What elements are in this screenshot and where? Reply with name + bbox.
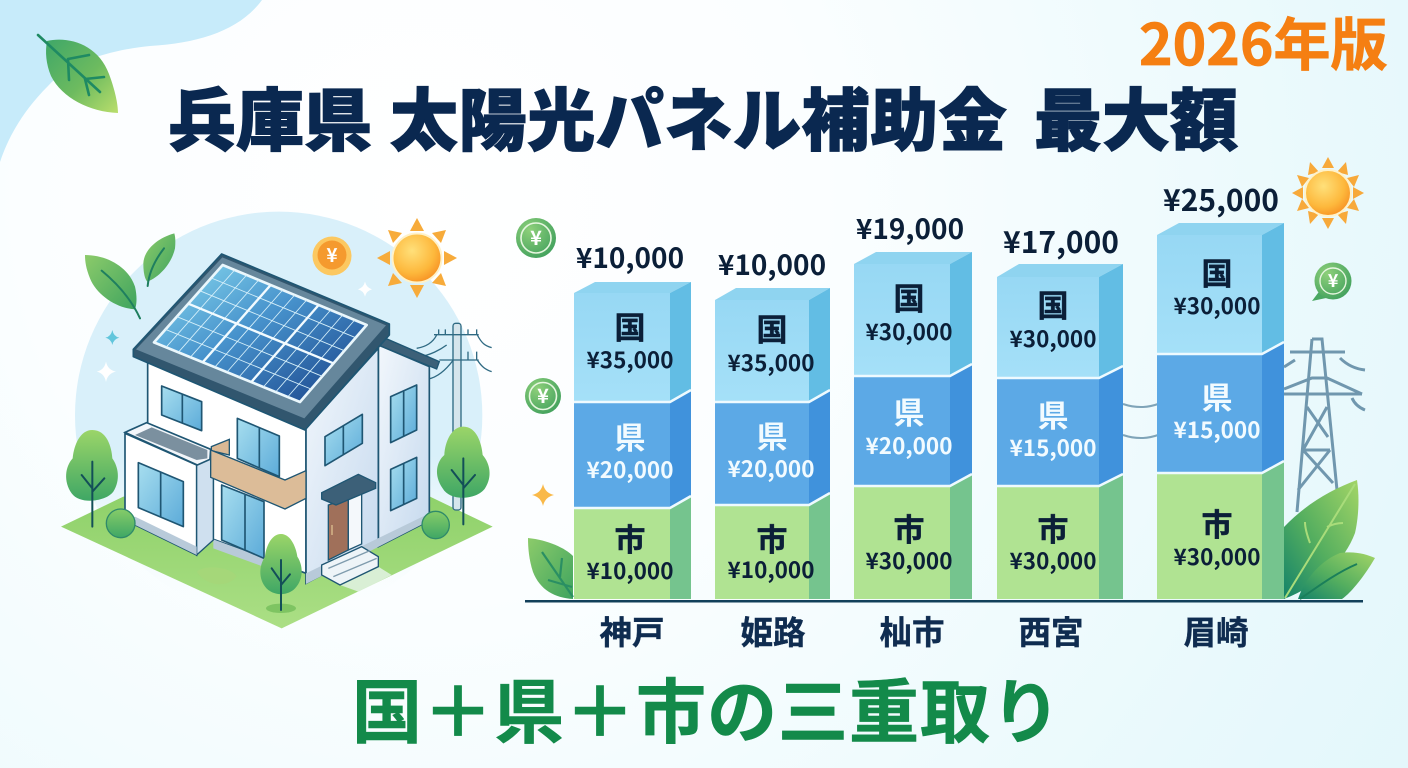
entrance — [322, 474, 378, 585]
bar: 西宮: 県 — [1038, 391, 1068, 436]
bar: 神戸: 国 — [614, 303, 646, 348]
title: 兵庫県 — [168, 66, 372, 165]
side wing — [378, 337, 439, 547]
title: 最大額 — [1034, 66, 1238, 165]
bar: 眉崎: 県 — [1202, 373, 1232, 418]
icon: wires between bars — [1123, 404, 1158, 438]
title: 太陽光パネル補助金 — [390, 66, 1007, 165]
icon: green yen coin top: ¥ — [530, 222, 542, 251]
annex — [125, 423, 213, 555]
bottom slogan: 国＋県＋市の三重取り — [352, 657, 1062, 758]
icon: orange yen coin: ¥ — [326, 241, 338, 268]
windows — [138, 385, 417, 558]
solar panel — [154, 265, 367, 402]
icon: green yen coin middle — [525, 378, 561, 414]
bar: 神戸: ¥10,000 — [576, 237, 684, 277]
city labels: 杣市 — [879, 607, 945, 654]
icon: sun near house — [377, 218, 457, 298]
bar: 杣市: 市 — [894, 505, 924, 550]
bar: 西宮: ¥17,000 — [1003, 218, 1119, 262]
icon: sun near tower — [1292, 157, 1364, 229]
icon: top-left leaf — [38, 35, 118, 113]
illustration: house — [61, 212, 493, 628]
bar: 西宮: 国 — [1038, 281, 1068, 326]
house backdrop circle — [75, 212, 482, 619]
corner wave — [0, 0, 262, 162]
city labels: 神戸 — [599, 607, 665, 654]
front-right wall — [306, 348, 378, 583]
icon: transmission tower — [1284, 339, 1365, 512]
bar: 杣市: 県 — [894, 388, 924, 433]
bar: 姫路: 市 — [756, 515, 788, 560]
bar: 神戸 — [574, 237, 691, 599]
bar: 神戸: ¥20,000 — [587, 453, 673, 485]
roof — [133, 254, 389, 430]
bar: 杣市: ¥19,000 — [856, 208, 964, 248]
year badge: 2026年版 — [1139, 0, 1388, 82]
bar: 西宮: ¥15,000 — [1010, 431, 1096, 463]
sparkles — [97, 282, 372, 382]
icon: leaf by first bar — [528, 538, 573, 599]
icon: green yen coin middle: ¥ — [537, 380, 549, 409]
bar: 杣市: ¥30,000 — [866, 544, 952, 576]
chart baseline — [525, 600, 1363, 602]
bar: 眉崎: ¥30,000 — [1174, 540, 1260, 572]
bar: 姫路 — [715, 244, 830, 599]
bar: 眉崎: 市 — [1202, 500, 1232, 545]
bar: 姫路: 県 — [756, 412, 788, 457]
bar: 杣市: ¥30,000 — [866, 315, 952, 347]
icon: green yen coin top — [516, 218, 556, 258]
icon: orange sparkle — [532, 484, 554, 506]
title — [168, 66, 1238, 165]
bar: 神戸: ¥35,000 — [587, 343, 673, 375]
trees — [66, 427, 490, 613]
city labels: 姫路 — [740, 607, 806, 654]
bar: 姫路: 国 — [756, 305, 788, 350]
foundation — [213, 513, 429, 584]
bar: 眉崎: ¥15,000 — [1174, 413, 1260, 445]
icon: green speech coin: ¥ — [1328, 267, 1339, 293]
bar: 姫路: ¥20,000 — [728, 452, 814, 484]
bar: 西宮: ¥30,000 — [1010, 322, 1096, 354]
bar: 杣市 — [854, 208, 972, 599]
floating leaves — [85, 233, 175, 318]
bar: 姫路: ¥10,000 — [718, 244, 826, 284]
bar: 姫路: ¥35,000 — [728, 346, 814, 378]
icon: green speech coin — [1312, 262, 1352, 301]
city labels — [599, 607, 1249, 654]
bar: 眉崎: ¥30,000 — [1174, 289, 1260, 321]
bar: 西宮 — [997, 218, 1123, 599]
city labels: 西宮 — [1018, 607, 1084, 654]
bar: 神戸: 県 — [614, 413, 646, 458]
bar: 眉崎: ¥25,000 — [1163, 176, 1279, 220]
icon: big leaves lower right — [1284, 480, 1375, 599]
icon: orange yen coin — [312, 236, 352, 276]
balcony — [211, 439, 306, 509]
bar: 杣市: 国 — [894, 274, 924, 319]
bar: 杣市: ¥20,000 — [866, 429, 952, 461]
city labels: 眉崎 — [1183, 607, 1249, 654]
bar: 西宮: 市 — [1038, 505, 1068, 550]
utility pole — [417, 323, 492, 510]
left wall — [148, 362, 306, 573]
bar: 神戸: ¥10,000 — [587, 554, 673, 586]
lawn — [61, 497, 493, 628]
bar: 眉崎 — [1157, 176, 1284, 599]
chart: stacked subsidy bars — [574, 176, 1284, 599]
bar: 神戸: 市 — [614, 515, 646, 560]
bar: 姫路: ¥10,000 — [728, 553, 814, 585]
bar: 西宮: ¥30,000 — [1010, 544, 1096, 576]
bar: 眉崎: 国 — [1202, 249, 1232, 294]
